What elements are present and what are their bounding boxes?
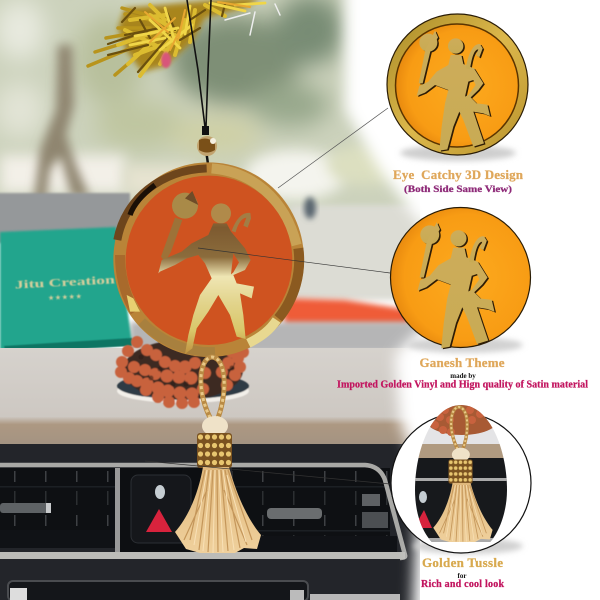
teal box (0, 227, 132, 353)
road and scenery (130, 197, 430, 352)
teal box: ★ ★ ★ ★ ★ (48, 293, 82, 302)
caption: for: for (458, 572, 466, 580)
heading: Eye Catchy 3D Design: Eye Catchy 3D Design (393, 167, 524, 182)
teal box: Jitu Creation (14, 272, 116, 292)
hanging cords and bead (187, 0, 217, 171)
heading: Ganesh Theme: Ganesh Theme (420, 355, 505, 370)
caption: Rich and cool look: Rich and cool look (421, 579, 504, 590)
white fade toward the right side (345, 0, 600, 600)
dashboard (0, 348, 435, 600)
medallion: 3D design (387, 14, 528, 155)
heading: Golden Tussle: Golden Tussle (422, 555, 503, 570)
pendant gold rim (113, 162, 304, 357)
medallion shadow bottom (413, 538, 523, 554)
subheading: Both Side Same View: (Both Side Same View) (404, 184, 512, 195)
blurred photo background: trees and sky (0, 0, 420, 220)
car air vents and hazard switch (0, 465, 405, 600)
pendant Hanuman figure (158, 191, 254, 354)
connector line to tassel circle (145, 461, 390, 484)
rudraksha bead mala (115, 336, 249, 409)
medallion shadow middle (407, 337, 523, 353)
connector line to middle medallion (198, 248, 390, 273)
connector line to top medallion (278, 108, 388, 188)
caption: materials: Imported Golden Vinyl and Hign quality of Satin material (337, 380, 588, 390)
medallion shadow top (400, 145, 516, 161)
background wall (0, 193, 130, 243)
circle: tassel close-up (391, 400, 531, 553)
tinsel garland (88, 0, 280, 76)
tassel on pendant (175, 357, 261, 553)
medallion: theme (390, 208, 530, 349)
main pendant: Hanuman ornament (113, 162, 304, 357)
caption: made by: made by (450, 372, 476, 380)
